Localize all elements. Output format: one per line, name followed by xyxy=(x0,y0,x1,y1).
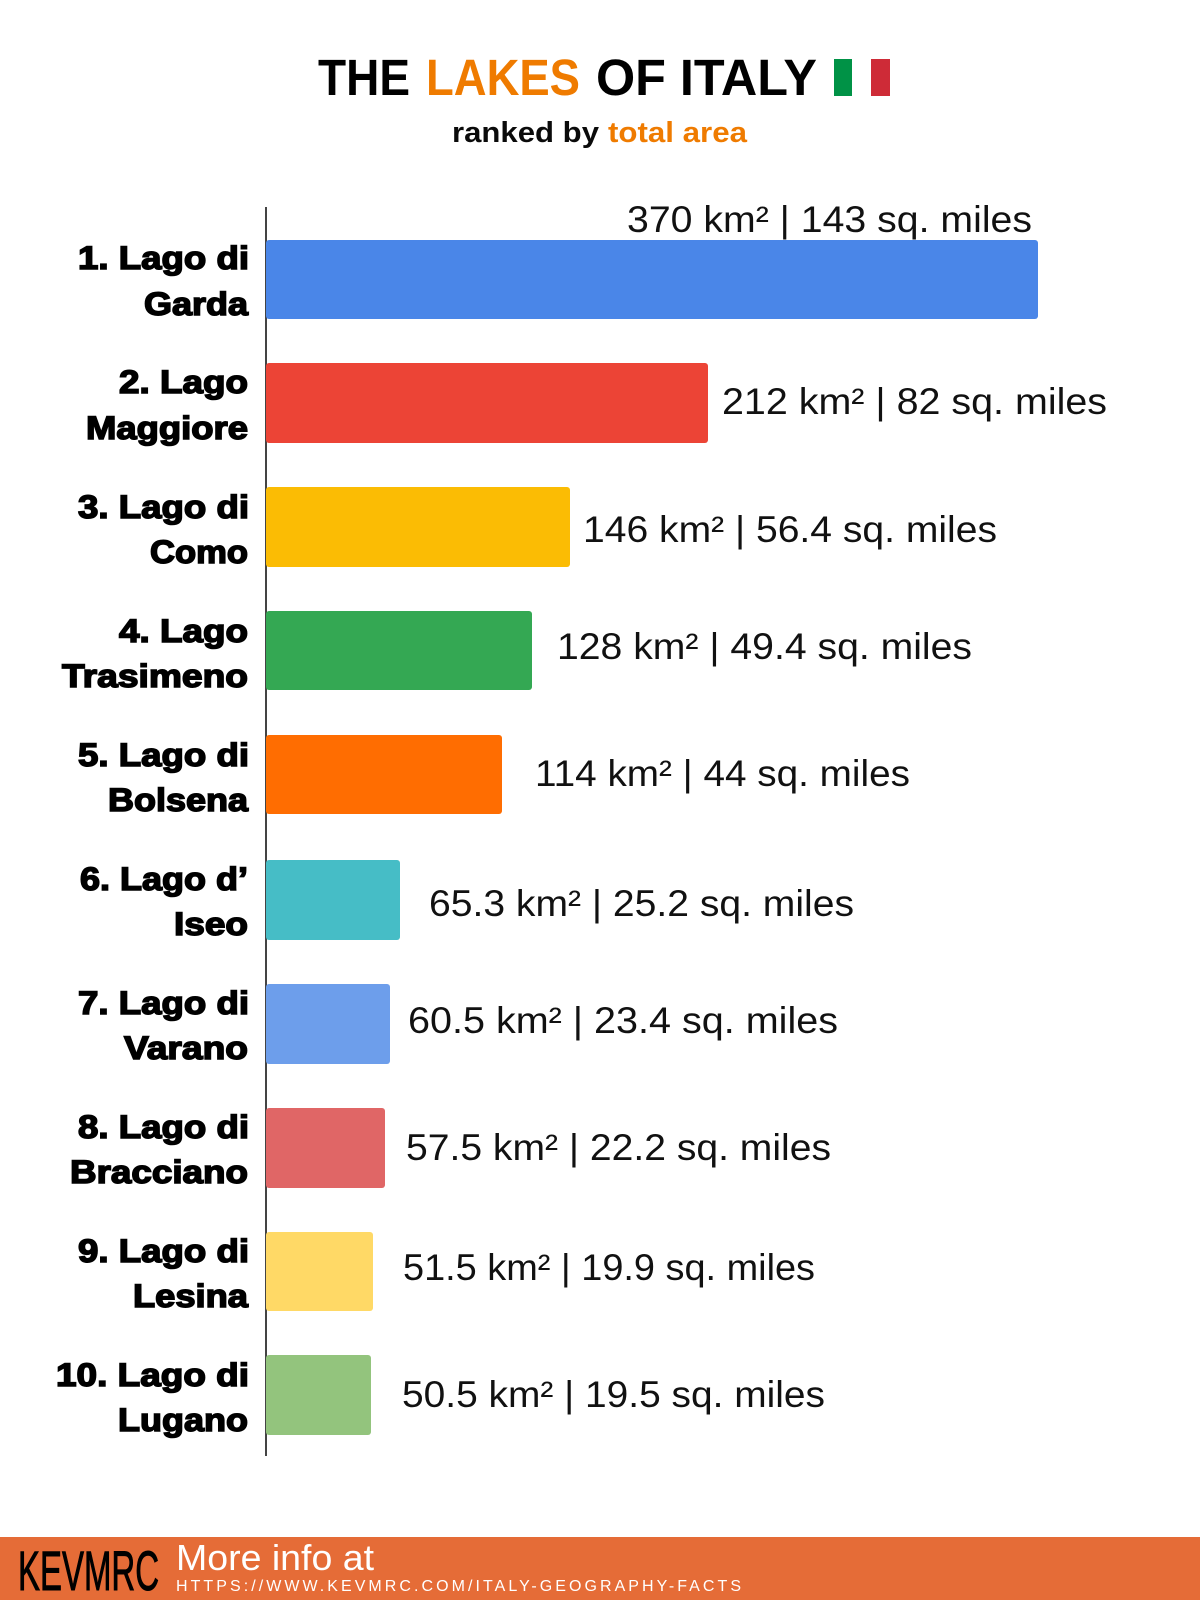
title: OF ITALY xyxy=(596,49,817,106)
subtitle: total area xyxy=(608,117,748,149)
lake 3: Lago di Como: 3. Lago di xyxy=(78,489,249,525)
lake 3: Lago di Como: Como xyxy=(150,534,248,570)
lake 8: Lago di Bracciano: Bracciano xyxy=(70,1154,248,1190)
lake 9: Lago di Lesina: Lesina xyxy=(133,1278,248,1314)
lake 4: Lago Trasimeno: 4. Lago xyxy=(119,613,248,649)
lake 6: Lago d'Iseo: Iseo xyxy=(174,906,248,942)
lake 7: Lago di Varano: Varano xyxy=(124,1030,248,1066)
subtitle xyxy=(452,117,748,149)
lake 1: Lago di Garda: Garda xyxy=(144,286,248,322)
lake 4: Lago Trasimeno xyxy=(62,611,972,694)
lake 1: Lago di Garda: 1. Lago di xyxy=(78,240,249,276)
footer url: HTTPS://WWW.KEVMRC.COM/ITALY-GEOGRAPHY-FACTS xyxy=(176,1578,741,1595)
lake 7: Lago di Varano xyxy=(78,984,838,1066)
lake 5: Lago di Bolsena xyxy=(78,735,910,818)
bar chart xyxy=(56,199,1107,1456)
lake 2: Lago Maggiore xyxy=(86,363,1107,446)
lake 7: Lago di Varano: 60.5 km² | 23.4 sq. miles xyxy=(408,1000,838,1041)
lake 2: Lago Maggiore: Maggiore xyxy=(86,410,248,446)
lake 4: Lago Trasimeno: Trasimeno xyxy=(62,658,248,694)
lake 10: Lago di Lugano: Lugano xyxy=(118,1402,248,1438)
lake 3: Lago di Como xyxy=(78,487,997,570)
lake 4: Lago Trasimeno: 128 km² | 49.4 sq. miles xyxy=(557,626,972,667)
title xyxy=(318,49,817,106)
lake 8: Lago di Bracciano: 8. Lago di xyxy=(78,1109,249,1145)
icon: Italian flag xyxy=(834,59,890,96)
subtitle: ranked by xyxy=(452,117,599,149)
lake 5: Lago di Bolsena: 5. Lago di xyxy=(78,737,249,773)
lake 9: Lago di Lesina xyxy=(78,1232,815,1314)
axis line xyxy=(265,207,267,1456)
lake 9: Lago di Lesina: 51.5 km² | 19.9 sq. miles xyxy=(403,1247,815,1288)
lake 2: Lago Maggiore: 212 km² | 82 sq. miles xyxy=(722,381,1107,422)
lake 8: Lago di Bracciano xyxy=(70,1108,831,1190)
lake 10: Lago di Lugano: 10. Lago di xyxy=(56,1357,249,1393)
lake 5: Lago di Bolsena: Bolsena xyxy=(108,782,248,818)
footer heading: More info at xyxy=(176,1537,374,1578)
lake 7: Lago di Varano: 7. Lago di xyxy=(78,985,249,1021)
lake 1: Lago di Garda: 370 km² | 143 sq. miles xyxy=(627,199,1032,240)
lake 6: Lago d'Iseo: 65.3 km² | 25.2 sq. miles xyxy=(429,883,854,924)
lake 6: Lago d'Iseo: 6. Lago d’ xyxy=(80,861,248,897)
title: LAKES xyxy=(426,49,580,106)
lake 3: Lago di Como: 146 km² | 56.4 sq. miles xyxy=(583,509,997,550)
title: THE xyxy=(318,49,410,106)
lake 9: Lago di Lesina: 9. Lago di xyxy=(78,1233,249,1269)
lake 8: Lago di Bracciano: 57.5 km² | 22.2 sq. miles xyxy=(406,1127,831,1168)
lake 2: Lago Maggiore: 2. Lago xyxy=(119,364,248,400)
lake 5: Lago di Bolsena: 114 km² | 44 sq. miles xyxy=(535,753,910,794)
lake 10: Lago di Lugano xyxy=(56,1355,825,1438)
footer band xyxy=(0,1537,1200,1600)
lake 6: Lago d'Iseo xyxy=(80,860,854,942)
lake 1: Lago di Garda xyxy=(78,199,1038,322)
lake 10: Lago di Lugano: 50.5 km² | 19.5 sq. miles xyxy=(402,1374,825,1415)
